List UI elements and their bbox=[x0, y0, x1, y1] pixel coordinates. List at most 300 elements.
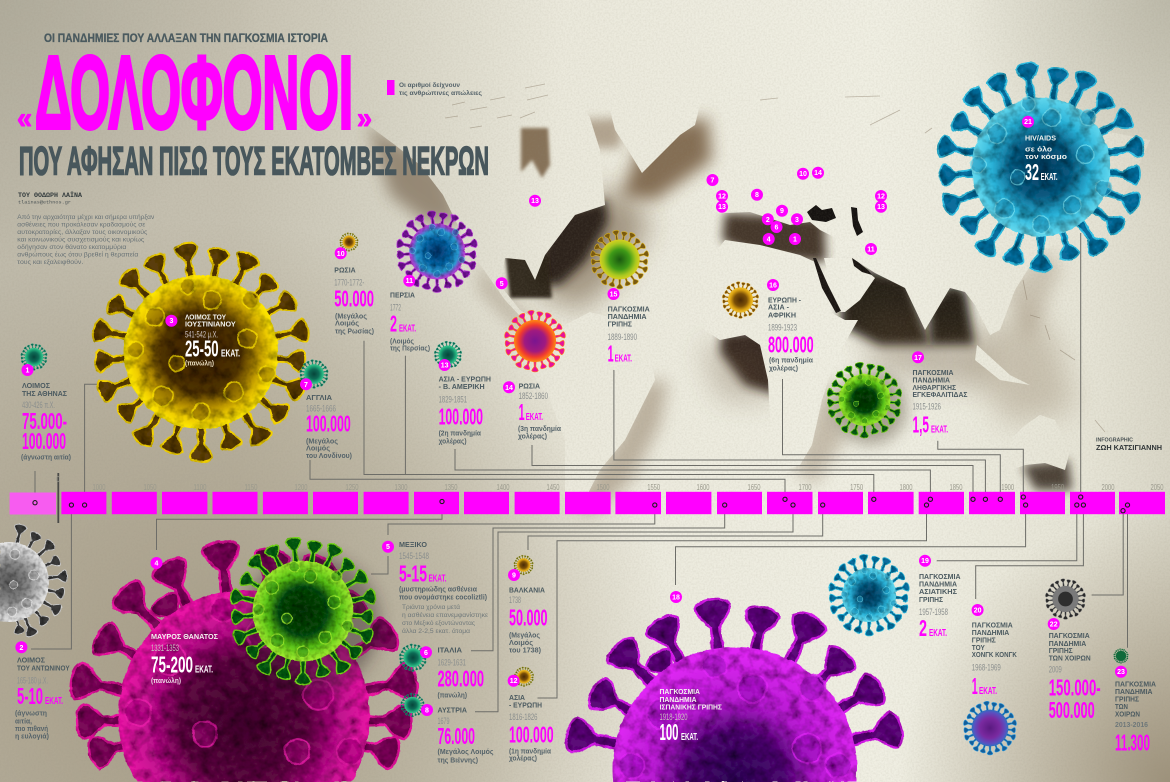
label: ΧΟΝΓΚ ΚΟΝΓΚ bbox=[972, 650, 1017, 659]
label: 1772 bbox=[390, 303, 401, 314]
label: ΠΑΓΚΟΣΜΙΑ bbox=[660, 687, 700, 696]
byline: tlainas@ethnos.gr bbox=[18, 200, 71, 206]
label: ΡΩΣΙΑ bbox=[519, 381, 540, 390]
year labels: 1850 bbox=[950, 482, 963, 492]
year labels: 2050 bbox=[1150, 482, 1164, 492]
label: ΠΑΝΔΗΜΙΑ bbox=[972, 628, 1010, 637]
label: ΤΗΣ ΑΘΗΝΑΣ bbox=[22, 389, 67, 398]
year labels: 1550 bbox=[647, 482, 660, 492]
label: 1957-1958 bbox=[919, 607, 948, 618]
label bbox=[1025, 134, 1067, 185]
icon: gold virus bbox=[722, 281, 759, 318]
label: 100.000 bbox=[439, 403, 483, 429]
label: (1η πανδημία bbox=[509, 748, 552, 755]
badge 3: 3 bbox=[169, 318, 173, 325]
badge 7: 7 bbox=[304, 382, 308, 389]
badge 11: 11 bbox=[406, 278, 413, 285]
map location badges: 14 bbox=[814, 170, 822, 177]
connector lines bbox=[31, 233, 1128, 712]
panel: 18 Spanish flu bbox=[564, 591, 906, 782]
map location badges: 11 bbox=[867, 246, 875, 254]
panel: 4 Black Death bbox=[68, 539, 420, 782]
label: ΜΕΞΙΚΟ bbox=[399, 540, 427, 549]
icon: teal virus bbox=[21, 343, 47, 370]
badge 17 bbox=[912, 351, 924, 363]
year labels: 1950 bbox=[1051, 482, 1064, 492]
label: ΓΡΙΠΗΣ bbox=[1115, 695, 1139, 704]
label: 5-15 bbox=[399, 561, 427, 587]
label: ΕΚΑΤ. bbox=[428, 573, 447, 585]
legend bbox=[387, 80, 482, 97]
badge 11 bbox=[403, 275, 415, 287]
label bbox=[15, 656, 70, 740]
panel: 11 Persia bbox=[390, 210, 478, 353]
label: ΠΑΝΔΗΜΙΑ bbox=[919, 580, 957, 589]
label: 50.000 bbox=[509, 605, 548, 631]
label: 1816-1826 bbox=[509, 712, 538, 723]
label: 76.000 bbox=[438, 723, 475, 749]
label: 280.000 bbox=[438, 666, 484, 692]
icon: grey virus, cropped by the left page edge bbox=[0, 523, 68, 638]
label bbox=[438, 646, 484, 699]
year labels: 1000 bbox=[92, 482, 106, 492]
badge 21 bbox=[1022, 116, 1034, 128]
label: ΓΡΙΠΗΣ bbox=[1049, 646, 1073, 655]
panel: 1 Plague of Athens bbox=[21, 343, 71, 462]
label: της Ρωσίας) bbox=[335, 328, 374, 335]
label: ΕΚΑΤ. bbox=[45, 695, 63, 707]
label bbox=[912, 368, 968, 438]
label: ΙΤΑΛΙΑ bbox=[438, 646, 463, 655]
label: ΛΟΙΜΟΣ bbox=[22, 381, 50, 390]
label: ΕΚΑΤ. bbox=[681, 731, 698, 743]
year labels: 2000 bbox=[1102, 482, 1115, 492]
label: (άγνωστη bbox=[15, 711, 47, 718]
map location badges: 9 bbox=[780, 208, 784, 215]
label: στο Μεξικό εξοντώνοντας bbox=[402, 619, 476, 627]
label: του Λονδίνου) bbox=[306, 453, 352, 460]
panel: 6 Italy bbox=[399, 644, 484, 699]
map location badges: 13 bbox=[718, 204, 726, 211]
badge 6: 6 bbox=[424, 650, 428, 657]
intro paragraph: ασθένειες που προκάλεσαν κραδασμούς σε bbox=[17, 220, 145, 228]
badge 22 bbox=[1048, 618, 1060, 630]
badge 4 bbox=[150, 557, 162, 569]
badge 19: 19 bbox=[921, 558, 929, 565]
label: 1545-1548 bbox=[399, 551, 429, 562]
label: της Βιέννης) bbox=[438, 757, 478, 764]
label: ΠΑΝΔΗΜΙΑ bbox=[608, 312, 647, 321]
year zero tick bbox=[57, 473, 59, 523]
map location badges bbox=[496, 167, 887, 289]
badge 3 bbox=[165, 315, 177, 327]
year labels: 0 bbox=[56, 474, 60, 484]
panel: 3 Plague of Justinian bbox=[91, 242, 311, 462]
label: Λοιμός bbox=[306, 446, 330, 452]
label: ΕΚΑΤ. bbox=[221, 348, 240, 360]
persian gulf bbox=[852, 258, 872, 275]
badge 20 bbox=[972, 604, 984, 616]
year labels: 1400 bbox=[496, 482, 510, 492]
timeline bbox=[10, 473, 1165, 523]
label: 1852-1860 bbox=[519, 391, 548, 402]
credit: ΖΩΗ ΚΑΤΣΙΓΙΑΝΝΗ bbox=[1096, 443, 1162, 452]
panel: 14 Russia 1852 bbox=[503, 310, 566, 440]
label: (Λοιμός bbox=[390, 338, 414, 345]
label: 1889-1890 bbox=[608, 332, 637, 343]
label: 1829-1851 bbox=[439, 395, 467, 406]
label: ΠΑΓΚΟΣΜΙΑ bbox=[919, 572, 961, 581]
label: 1 bbox=[608, 341, 614, 367]
year labels: 1350 bbox=[444, 482, 458, 492]
badge 18: 18 bbox=[672, 594, 680, 602]
label: 2009 bbox=[1049, 665, 1062, 676]
hudson bay bbox=[521, 128, 550, 178]
year labels: 1300 bbox=[394, 482, 408, 492]
label: ΑΣΙΑΤΙΚΗΣ bbox=[919, 587, 957, 596]
timeline event nodes bbox=[33, 495, 1130, 513]
badge 8: 8 bbox=[425, 708, 429, 714]
credit: INFOGRAPHIC bbox=[1096, 438, 1133, 444]
label: αιτία, bbox=[15, 718, 32, 725]
label: ΕΚΑΤ. bbox=[399, 323, 416, 335]
year labels bbox=[56, 474, 1164, 492]
year labels: 1500 bbox=[596, 482, 610, 492]
intro paragraph: τους και εξαλειφθούν. bbox=[17, 258, 83, 266]
panel: 22 Swine flu 2009 bbox=[1045, 578, 1101, 723]
label: ΛΟΙΜΟΣ bbox=[17, 656, 45, 665]
label: ΙΣΠΑΝΙΚΗΣ ΓΡΙΠΗΣ bbox=[660, 702, 722, 711]
label: ΠΑΝΔΗΜΙΑ bbox=[660, 695, 697, 704]
label: 150.000- bbox=[1049, 675, 1101, 701]
arctic coast marks bbox=[445, 84, 1105, 432]
label: (άγνωστη αιτία) bbox=[21, 454, 71, 462]
label: σε όλο bbox=[1025, 145, 1052, 154]
intro paragraph: και κοινωνικούς συσχετισμούς και κυρίως bbox=[17, 236, 144, 244]
label: χολέρας) bbox=[518, 432, 547, 440]
map location badges: 3 bbox=[795, 217, 799, 224]
year labels: 1800 bbox=[900, 482, 913, 492]
badge 14: 14 bbox=[505, 385, 513, 392]
map location badges: 7 bbox=[711, 178, 715, 184]
label: της Περσίας) bbox=[390, 346, 430, 353]
label: 500.000 bbox=[1049, 697, 1095, 723]
label: 1,5 bbox=[912, 412, 929, 438]
icon: large green virus, 5 Mexico bbox=[229, 537, 380, 690]
panel: 12 Asia Europe bbox=[508, 667, 554, 763]
icon: teal virus bbox=[434, 341, 462, 369]
label: 1331-1353 bbox=[151, 643, 179, 654]
label: ΓΡΙΠΗΣ bbox=[608, 320, 632, 329]
credit bbox=[1096, 438, 1162, 452]
label bbox=[390, 290, 430, 353]
year labels: 1700 bbox=[798, 482, 812, 492]
badge 2 bbox=[15, 641, 27, 653]
panel: 9 Balkans bbox=[508, 555, 548, 654]
black sea bbox=[807, 205, 836, 222]
label: 100.000 bbox=[509, 721, 554, 747]
label bbox=[399, 540, 488, 635]
year labels: 1150 bbox=[244, 482, 258, 492]
map location badges: 4 bbox=[767, 236, 771, 244]
icon: teal virus bbox=[401, 693, 424, 717]
icon: magenta virus, cropped by the bottom page edge bbox=[68, 539, 420, 782]
label: η ευλογιά) bbox=[15, 732, 49, 740]
title block: ΔΟΛΟΦΟΝΟΙ bbox=[35, 35, 353, 150]
label bbox=[334, 266, 374, 335]
label: 5-10 bbox=[17, 683, 43, 709]
label bbox=[1049, 631, 1101, 723]
icon: gold virus bbox=[340, 232, 358, 251]
label: ΕΚΑΤ. bbox=[615, 353, 632, 365]
label bbox=[518, 381, 562, 440]
icon: purple virus, cropped by the bottom page edge bbox=[564, 597, 906, 782]
label bbox=[185, 312, 240, 368]
label: ΛΗΘΑΡΓΙΚΗΣ bbox=[912, 383, 956, 392]
panel: 15 Flu pandemic 1889 bbox=[590, 230, 650, 367]
label: (6η πανδημία bbox=[769, 358, 814, 365]
label: 100 bbox=[660, 719, 678, 745]
panel: 2 Antonine plague bbox=[0, 523, 70, 740]
subtitle: ΠΟΥ ΑΦΗΣΑΝ ΠΙΣΩ ΤΟΥΣ ΕΚΑΤΟΜΒΕΣ ΝΕΚΡΩΝ bbox=[19, 140, 489, 184]
label: ΓΡΙΠΗΣ bbox=[972, 636, 996, 645]
label: ΕΚΑΤ. bbox=[195, 664, 213, 676]
label: ΤΟΥ bbox=[972, 643, 985, 652]
label: HIV/AIDS bbox=[1025, 134, 1056, 143]
label: 2013-2016 bbox=[1115, 722, 1148, 729]
label: Λοιμός bbox=[335, 321, 359, 328]
map location badges: 5 bbox=[500, 281, 504, 288]
label: (μυστηριώδης ασθένεια bbox=[399, 587, 478, 594]
label: ΜΑΥΡΟΣ ΘΑΝΑΤΟΣ bbox=[151, 632, 218, 641]
label: ΤΟΥ ΑΝΤΩΝΙΝΟΥ bbox=[17, 664, 70, 673]
label: ΛΟΙΜΟΣ ΤΟΥ bbox=[185, 312, 226, 321]
label: 100.000 bbox=[306, 411, 351, 437]
label: 165-180 μ.Χ. bbox=[17, 675, 48, 686]
red sea bbox=[813, 258, 841, 313]
label: του 1738) bbox=[509, 647, 541, 654]
year labels: 1600 bbox=[696, 482, 710, 492]
year labels: 1750 bbox=[850, 482, 863, 492]
label: 2 bbox=[390, 311, 397, 337]
label: ΑΣΙΑ - bbox=[768, 302, 789, 312]
badge 2: 2 bbox=[19, 645, 23, 652]
label: 75.000- bbox=[22, 408, 67, 434]
year labels: 1200 bbox=[294, 482, 308, 492]
label: 1679 bbox=[438, 716, 450, 727]
label: ΠΑΓΚΟΣΜΙΑ bbox=[608, 305, 650, 314]
label: ΓΡΙΠΗΣ bbox=[919, 595, 943, 604]
panel: 20 Hong Kong flu bbox=[963, 604, 1017, 755]
label: ΠΑΝΔΗΜΙΑ bbox=[912, 376, 950, 385]
land masses bbox=[368, 78, 1150, 505]
intro paragraph: Από την αρχαιότητα μέχρι και σήμερα υπήρξαν bbox=[17, 213, 155, 221]
map location badges: 12 bbox=[877, 194, 885, 200]
badge 20: 20 bbox=[974, 608, 982, 614]
label: 1665-1666 bbox=[306, 404, 336, 415]
label: ΠΑΝΔΗΜΙΑ bbox=[1049, 639, 1087, 648]
label: 1738 bbox=[509, 595, 521, 606]
label bbox=[438, 705, 494, 764]
icon: green virus with shadow bbox=[827, 362, 906, 444]
map location badges: 6 bbox=[775, 224, 779, 232]
badge 22: 22 bbox=[1050, 622, 1058, 628]
label bbox=[768, 295, 814, 373]
label: ΕΚΑΤ. bbox=[931, 424, 948, 436]
label: τον κόσμο bbox=[1025, 152, 1067, 161]
legend: τις ανθρώπινες απώλειες bbox=[399, 89, 482, 97]
year labels: 1050 bbox=[144, 482, 157, 492]
icon: blue virus bbox=[828, 554, 910, 636]
label bbox=[509, 585, 548, 654]
kicker: ΟΙ ΠΑΝΔΗΜΙΕΣ ΠΟΥ ΑΛΛΑΞΑΝ ΤΗΝ ΠΑΓΚΟΣΜΙΑ ΙΣΤΟΡΙΑ bbox=[44, 33, 328, 45]
label: χολέρας) bbox=[439, 437, 467, 445]
panel: 5 Mexico bbox=[382, 540, 488, 635]
icon: blue-purple virus bbox=[396, 210, 478, 292]
label bbox=[919, 572, 961, 641]
badge 21: 21 bbox=[1024, 119, 1032, 126]
label: ΠΑΓΚΟΣΜΙΑ bbox=[912, 368, 954, 377]
year labels: 1650 bbox=[748, 482, 761, 492]
caspian sea bbox=[851, 207, 863, 236]
label: (Μεγάλος Λοιμός bbox=[438, 748, 494, 756]
year labels: 1900 bbox=[1001, 482, 1014, 492]
label: ΠΑΓΚΟΣΜΙΑ bbox=[1115, 680, 1156, 689]
label: ΒΑΛΚΑΝΙΑ bbox=[509, 585, 545, 594]
label: 541-542 μ.Χ. bbox=[185, 330, 218, 341]
label: ΠΑΝΔΗΜΙΑ bbox=[1115, 687, 1153, 696]
label: ΑΦΡΙΚΗ bbox=[768, 310, 796, 319]
legend: Οι αριθμοί δείχνουν bbox=[399, 82, 460, 89]
label: 32 bbox=[1025, 159, 1039, 185]
label: ΙΟΥΣΤΙΝΙΑΝΟΥ bbox=[185, 320, 236, 329]
badge 13: 13 bbox=[441, 362, 449, 370]
panel: 7 England bbox=[300, 359, 352, 460]
badge 5: 5 bbox=[386, 544, 390, 551]
label: ΕΚΑΤ. bbox=[526, 411, 543, 423]
label: 430-426 π.Χ. bbox=[22, 400, 55, 411]
year labels: 1250 bbox=[346, 482, 359, 492]
panel: 23 Swine flu 2013 bbox=[1114, 648, 1156, 756]
label: ΤΩΝ bbox=[1115, 702, 1128, 711]
label bbox=[439, 375, 491, 445]
map location badges: 13 bbox=[877, 204, 885, 211]
timeline bars bbox=[10, 492, 1165, 514]
label bbox=[509, 693, 554, 763]
year labels: 1450 bbox=[546, 482, 560, 492]
map location badges: 13 bbox=[531, 198, 539, 205]
label: 2 bbox=[919, 615, 927, 641]
icon: fire-coloured virus bbox=[504, 310, 566, 372]
label: άλλα 2-2,5 εκατ. άτομα bbox=[402, 627, 470, 635]
intro paragraph: οδήγησαν στον θάνατο εκατομμύρια bbox=[17, 243, 126, 251]
panel: 16 Cholera 1899 bbox=[722, 279, 814, 373]
label: - Β. ΑΜΕΡΙΚΗ bbox=[439, 382, 485, 391]
opening quote: « bbox=[17, 102, 32, 135]
label bbox=[21, 381, 71, 462]
badge 23: 23 bbox=[1117, 669, 1125, 676]
badge 15: 15 bbox=[610, 292, 617, 298]
panel: 10 Russia 1770 bbox=[334, 232, 374, 335]
label: ΠΑΓΚΟΣΜΙΑ bbox=[972, 620, 1013, 629]
label: πιο πιθανή bbox=[15, 726, 48, 733]
intro paragraph: ανθρώπους έως ότου βρεθεί η θεραπεία bbox=[17, 250, 138, 258]
label: ΕΓΚΕΦΑΛΙΤΙΔΑΣ bbox=[912, 390, 968, 399]
panel: 17 Lethargic encephalitis bbox=[827, 351, 968, 444]
label bbox=[608, 305, 650, 367]
world map bbox=[368, 78, 1150, 515]
icon: lime virus bbox=[590, 230, 649, 289]
label: 50.000 bbox=[334, 286, 374, 312]
label: που ονομάστηκε cocoliztli) bbox=[399, 594, 487, 601]
map location badges: 8 bbox=[755, 192, 759, 199]
label: Λοιμός bbox=[509, 640, 533, 647]
label bbox=[1115, 680, 1156, 756]
panel: 21 HIV/AIDS bbox=[936, 62, 1146, 272]
label bbox=[306, 393, 352, 460]
icon: gold virus bbox=[514, 555, 534, 575]
label: (πανώλη) bbox=[438, 691, 467, 699]
badge 4: 4 bbox=[155, 560, 159, 568]
byline bbox=[18, 191, 83, 206]
badge 17: 17 bbox=[914, 355, 922, 362]
label: - ΕΥΡΩΠΗ bbox=[509, 700, 542, 709]
label: ΠΑΓΚΟΣΜΙΑ bbox=[1049, 631, 1090, 640]
label bbox=[660, 687, 722, 745]
label: 800.000 bbox=[768, 331, 814, 357]
label: 1629-1631 bbox=[438, 658, 466, 669]
intro paragraph: αυτοκρατορίες, άλλαξαν τους οικονομικούς bbox=[17, 228, 147, 236]
label: ΤΩΝ ΧΟΙΡΩΝ bbox=[1049, 654, 1091, 663]
label: 1 bbox=[519, 399, 525, 425]
label: 1899-1923 bbox=[768, 323, 797, 334]
label: χολέρας) bbox=[509, 755, 537, 763]
label: (Μεγάλος bbox=[509, 631, 540, 639]
icon: cyan virus bbox=[936, 62, 1146, 272]
map location badges: 10 bbox=[799, 171, 807, 178]
label: ΕΚΑΤ. bbox=[979, 685, 997, 697]
label: ΕΚΑΤ. bbox=[1041, 171, 1058, 183]
label: η ασθένεια επανεμφανίστηκε bbox=[402, 611, 488, 619]
icon: gold virus bbox=[514, 667, 534, 687]
label: (Μεγάλος bbox=[335, 312, 367, 320]
icon: yellow virus bbox=[91, 242, 311, 462]
icon: dark grey virus bbox=[1045, 578, 1086, 619]
year labels: 1100 bbox=[194, 482, 207, 492]
panel: 8 Austria bbox=[401, 693, 494, 764]
label: (πανώλη) bbox=[185, 360, 214, 368]
icon: teal virus bbox=[300, 359, 328, 388]
label: ΡΩΣΙΑ bbox=[334, 266, 356, 275]
label: χολέρας) bbox=[769, 365, 798, 373]
label: 1 bbox=[972, 673, 978, 699]
label: ΑΓΓΛΙΑ bbox=[306, 393, 332, 402]
panel: 19 Asian flu bbox=[828, 554, 961, 641]
badge 16: 16 bbox=[769, 282, 777, 290]
map location badges: 12 bbox=[718, 194, 726, 200]
label: ΧΟΙΡΩΝ bbox=[1115, 710, 1140, 719]
label: ΕΚΑΤ. bbox=[929, 627, 947, 639]
icon: small green virus bbox=[1114, 648, 1128, 663]
badge 9: 9 bbox=[512, 572, 516, 580]
title block bbox=[17, 33, 489, 184]
byline: ΤΟΥ ΘΟΔΩΡΗ ΛΑΪΝΑ bbox=[18, 191, 83, 200]
label: ΑΣΙΑ bbox=[509, 693, 525, 702]
panel: 13 Asia Europe N. America bbox=[434, 341, 491, 445]
label: (2η πανδημία bbox=[439, 431, 482, 438]
icon: blue-purple virus bbox=[963, 701, 1017, 755]
label: 1968-1969 bbox=[972, 663, 1001, 674]
